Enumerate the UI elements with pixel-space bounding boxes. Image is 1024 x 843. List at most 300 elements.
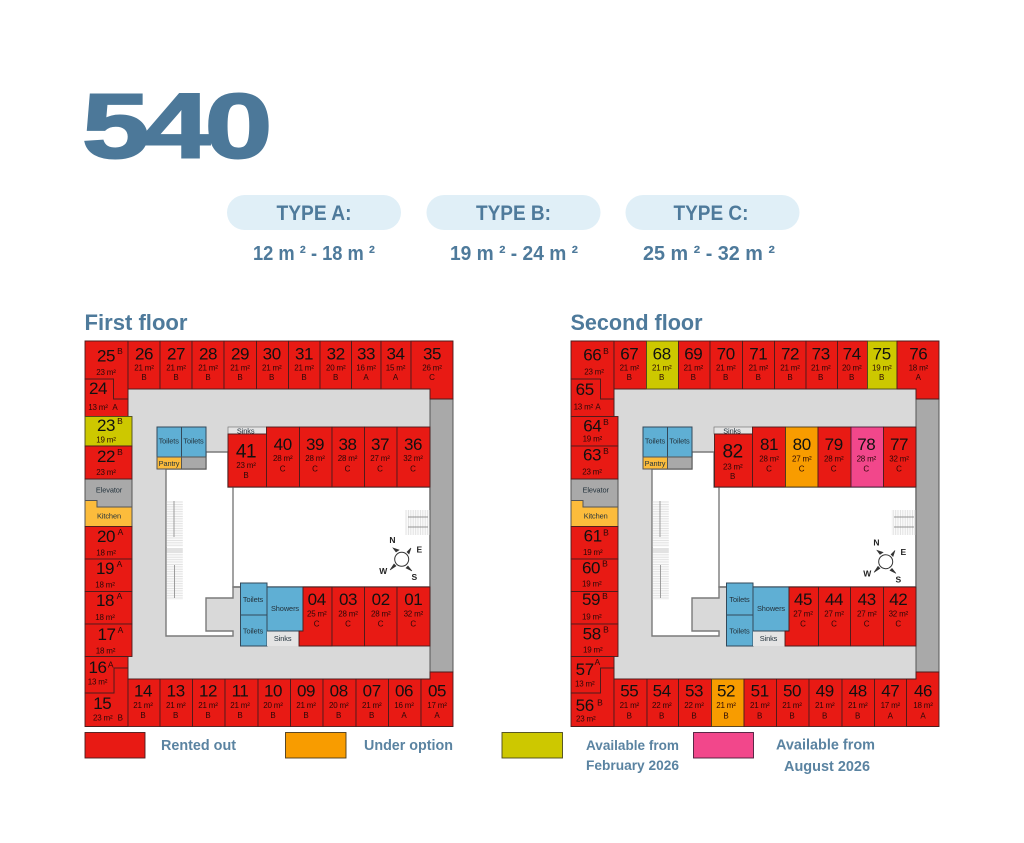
compass: [379, 535, 422, 582]
unit 74: 20 m²: [842, 364, 862, 372]
unit 60: 19 m²: [582, 580, 602, 589]
unit 78: C: [863, 465, 869, 474]
toilets block north: Pantry: [159, 459, 180, 468]
unit 17: 18 m²: [96, 647, 116, 656]
unit 17: 17: [97, 625, 116, 644]
unit 50: [776, 679, 809, 726]
unit 67: [614, 341, 646, 389]
sinks north: [228, 426, 266, 435]
unit 14: 14: [134, 682, 152, 701]
unit 08: 20 m²: [329, 701, 349, 710]
unit 47: 47: [881, 682, 899, 701]
unit 34: [381, 341, 411, 389]
unit 54: 22 m²: [652, 701, 672, 710]
unit 49: [809, 679, 842, 726]
unit 20: 20: [97, 527, 115, 546]
unit 65: 65: [576, 380, 594, 399]
unit 30: 21 m²: [262, 364, 282, 372]
unit 42: 32 m²: [889, 610, 909, 619]
unit 11: 11: [232, 682, 248, 701]
unit 10: [258, 679, 290, 726]
unit 01: [397, 587, 430, 646]
unit 51: [744, 679, 776, 726]
unit 35: [411, 341, 453, 399]
unit 43: 27 m²: [857, 610, 877, 619]
unit 12: 12: [199, 682, 217, 701]
unit 14: 21 m²: [133, 701, 153, 710]
unit 33: A: [363, 373, 369, 382]
compass: N: [873, 537, 880, 547]
elevator: [571, 479, 618, 507]
unit 11: 21 m²: [230, 701, 250, 710]
unit 28: B: [205, 373, 211, 382]
unit 66: [571, 341, 614, 399]
unit 08: [323, 679, 356, 726]
unit 22: B: [117, 447, 123, 457]
unit 04: C: [314, 620, 320, 629]
unit 16: 13 m²: [88, 678, 108, 687]
unit 71: B: [756, 373, 761, 382]
unit 53: B: [691, 712, 697, 720]
unit 19: 19: [96, 559, 114, 578]
unit 42: [884, 587, 916, 646]
unit 44: C: [831, 620, 837, 629]
unit 40: [266, 427, 300, 487]
unit 23: [85, 416, 132, 446]
unit 40: 28 m²: [273, 454, 293, 463]
unit 36: 36: [404, 435, 422, 454]
unit 03: [332, 587, 364, 646]
unit 82: 23 m²: [723, 462, 743, 471]
toilets and showers south: Toilets: [243, 595, 264, 604]
unit 22: 22: [97, 447, 115, 466]
unit 59: 59: [582, 590, 600, 609]
unit 09: 09: [297, 682, 315, 701]
kitchen: Kitchen: [584, 512, 608, 521]
unit 24: 13 m²: [88, 403, 108, 412]
unit 31: 31: [295, 344, 313, 363]
toilets and showers south: Toilets: [729, 627, 750, 636]
unit 20: A: [118, 527, 124, 537]
unit 25: [85, 341, 128, 399]
unit 30: [256, 341, 288, 389]
toilets block north: Toilets: [645, 436, 666, 445]
toilets block north: Toilets: [159, 436, 179, 445]
unit 60: B: [602, 559, 608, 569]
unit 58: 19 m²: [583, 646, 603, 655]
unit 58: 58: [583, 624, 601, 643]
unit 28: [192, 341, 224, 389]
unit 01: 01: [404, 590, 422, 609]
unit 39: C: [312, 464, 318, 473]
unit 77: 77: [890, 435, 908, 454]
unit 57: [571, 656, 614, 693]
unit 29: [224, 341, 256, 389]
unit 32: [320, 341, 352, 389]
unit 58: B: [603, 624, 609, 634]
unit 79: 28 m²: [824, 454, 844, 464]
unit 26: B: [141, 373, 147, 382]
compass: E: [900, 547, 906, 557]
unit 75: 75: [873, 344, 891, 363]
toilets and showers south: [726, 583, 789, 646]
unit 10: B: [270, 711, 276, 720]
compass: N: [389, 535, 396, 545]
unit 33: 16 m²: [356, 364, 376, 372]
unit 34: 34: [386, 344, 405, 363]
unit 66: 23 m²: [584, 367, 604, 376]
unit 04: 04: [308, 590, 326, 609]
unit 59: 19 m²: [582, 612, 602, 621]
unit 15: B: [118, 714, 123, 723]
unit 35: 35: [423, 344, 441, 363]
unit 04: [299, 587, 332, 646]
unit 48: 21 m²: [848, 701, 868, 710]
unit 16: A: [108, 660, 114, 670]
unit 78: [851, 427, 884, 487]
legend: available from August 2026: Available from: [776, 738, 875, 754]
unit 18: A: [117, 591, 123, 601]
unit 44: 44: [825, 590, 843, 609]
unit 68: 21 m²: [652, 364, 672, 372]
unit 12: [192, 679, 225, 726]
unit 65: A: [595, 402, 601, 411]
unit 30: B: [269, 373, 274, 382]
unit 73: 21 m²: [811, 364, 831, 372]
unit 24: A: [112, 403, 118, 412]
unit 06: A: [401, 711, 407, 720]
unit 01: 32 m²: [404, 610, 424, 619]
unit 27: 21 m²: [166, 364, 186, 372]
type A: TYPE A:: [276, 202, 352, 225]
unit 74: B: [849, 373, 854, 382]
unit 73: 73: [812, 344, 830, 363]
unit 79: [818, 427, 851, 487]
unit 66: 66: [583, 346, 601, 365]
unit 79: C: [831, 465, 837, 474]
kitchen: Kitchen: [97, 511, 121, 520]
unit 38: C: [345, 464, 351, 473]
unit 13: B: [173, 711, 178, 720]
unit 69: B: [691, 373, 696, 382]
heading: first floor: First floor: [84, 310, 188, 335]
type C: 25 m ² - 32 m ²: [643, 243, 775, 265]
unit 63: 23 m²: [582, 467, 602, 476]
unit 46: A: [920, 712, 926, 720]
unit 22: [85, 446, 132, 479]
corridor: [128, 389, 430, 679]
unit 67: B: [627, 373, 632, 382]
unit 37: 27 m²: [370, 454, 390, 463]
toilets and showers south: Showers: [271, 604, 299, 613]
unit 03: 03: [339, 590, 357, 609]
unit 03: 28 m²: [338, 610, 358, 619]
unit 25: B: [117, 346, 123, 356]
unit 53: [678, 679, 712, 726]
unit 36: 32 m²: [403, 454, 423, 463]
unit 54: [647, 679, 678, 726]
unit 68: 68: [653, 344, 671, 363]
unit 14: [128, 679, 160, 726]
unit 11: [225, 679, 258, 726]
courtyard: [166, 452, 430, 636]
unit 75: B: [879, 373, 884, 382]
type B: TYPE B:: [476, 202, 551, 225]
unit 10: 20 m²: [263, 701, 283, 710]
unit 30: 30: [263, 344, 281, 363]
unit 54: B: [659, 712, 664, 720]
unit 05: 17 m²: [427, 701, 447, 710]
unit 53: 22 m²: [684, 701, 704, 710]
unit 52: B: [723, 712, 729, 720]
unit 49: B: [822, 712, 827, 720]
unit 41: [228, 434, 266, 487]
unit 67: 67: [620, 344, 638, 363]
unit 23: 19 m²: [96, 436, 116, 445]
unit 76: [897, 341, 939, 399]
unit 28: 28: [199, 344, 217, 363]
unit 37: [364, 427, 397, 487]
type C: [626, 195, 800, 265]
unit 49: 21 m²: [815, 701, 835, 710]
unit 81: C: [766, 465, 772, 474]
unit 10: 10: [264, 682, 282, 701]
unit 43: C: [864, 620, 870, 629]
unit 48: 48: [849, 682, 867, 701]
toilets and showers south: Toilets: [729, 595, 750, 604]
unit 54: 54: [653, 682, 671, 701]
unit 34: 15 m²: [386, 364, 406, 372]
unit 07: 07: [363, 682, 381, 701]
unit 57: 13 m²: [575, 680, 595, 689]
unit 56: 56: [576, 696, 594, 715]
unit 39: 28 m²: [305, 454, 325, 463]
unit 18: [85, 591, 132, 624]
unit 44: [818, 587, 850, 646]
unit 80: 27 m²: [792, 454, 812, 464]
unit 53: 53: [685, 682, 703, 701]
unit 57: A: [594, 657, 600, 667]
unit 64: 19 m²: [583, 435, 603, 444]
unit 32: 20 m²: [326, 364, 346, 372]
unit 39: [300, 427, 332, 487]
unit 77: 32 m²: [889, 454, 909, 464]
unit 40: C: [280, 464, 286, 473]
unit 19: 18 m²: [95, 581, 115, 590]
unit 25: 23 m²: [96, 368, 116, 377]
unit 13: 13: [167, 682, 185, 701]
unit 56: [571, 668, 614, 726]
unit 35: 26 m²: [422, 364, 442, 372]
unit 41: B: [243, 471, 249, 480]
unit 50: 21 m²: [782, 701, 802, 710]
unit 24: [85, 379, 128, 416]
unit 25: 25: [97, 347, 115, 366]
unit 46: [906, 672, 939, 726]
toilets block north: Toilets: [183, 436, 204, 445]
elevator: [85, 479, 132, 507]
unit 76: 18 m²: [909, 364, 929, 372]
unit 48: B: [855, 712, 860, 720]
unit 47: [874, 679, 906, 726]
unit 61: 19 m²: [583, 548, 603, 557]
unit 61: B: [603, 528, 609, 538]
unit 38: 38: [338, 435, 357, 454]
unit 66: B: [603, 346, 609, 356]
compass: W: [863, 568, 872, 578]
unit 76: 76: [909, 344, 927, 363]
unit 64: 64: [583, 417, 601, 436]
unit 20: [85, 526, 132, 559]
unit 06: 06: [395, 682, 413, 701]
legend: under option: Under option: [364, 738, 453, 754]
toilets block north: Toilets: [669, 436, 690, 445]
unit 60: [571, 558, 618, 592]
unit 27: B: [173, 373, 179, 382]
unit 81: [752, 427, 786, 487]
unit 12: B: [205, 711, 211, 720]
unit 17: A: [118, 625, 124, 635]
unit 36: C: [410, 464, 416, 473]
unit 43: [850, 587, 884, 646]
unit 05: [421, 672, 453, 726]
unit 45: [785, 587, 818, 646]
unit 77: [884, 427, 916, 487]
unit 27: [160, 341, 192, 389]
unit 05: 05: [428, 682, 446, 701]
unit 09: 21 m²: [296, 701, 316, 710]
unit 44: 27 m²: [824, 610, 844, 619]
unit 14: B: [140, 711, 146, 720]
unit 52: [712, 679, 744, 726]
legend: rented out: Rented out: [161, 738, 236, 754]
unit 38: [332, 427, 364, 487]
compass: E: [416, 545, 422, 555]
unit 57: 57: [576, 660, 594, 679]
unit 80: [786, 427, 818, 487]
unit 70: 21 m²: [716, 364, 736, 372]
unit 26: [128, 341, 160, 389]
kitchen: [571, 500, 618, 526]
unit 07: B: [369, 711, 374, 720]
elevator: Elevator: [96, 486, 123, 495]
unit 80: 80: [793, 435, 811, 454]
gallery strip: [916, 399, 939, 672]
unit 58: [571, 624, 618, 656]
unit 09: B: [303, 711, 309, 720]
unit 31: [288, 341, 320, 389]
unit 29: 29: [231, 344, 249, 363]
unit 55: B: [627, 712, 632, 720]
unit 37: C: [377, 464, 383, 473]
unit 40: 40: [274, 435, 292, 454]
unit 04: 25 m²: [307, 610, 327, 619]
unit 77: C: [896, 465, 902, 474]
unit 79: 79: [825, 435, 843, 454]
unit 71: 71: [749, 344, 767, 363]
unit 17: [85, 624, 132, 656]
unit 60: 60: [582, 558, 600, 577]
unit 24: 24: [89, 379, 107, 398]
compass: [863, 537, 906, 584]
unit 71: 21 m²: [749, 364, 769, 372]
unit 72: 21 m²: [780, 364, 800, 372]
unit 33: 33: [357, 344, 375, 363]
unit 73: B: [818, 373, 823, 382]
heading: second floor: Second floor: [570, 310, 703, 335]
unit 52: 52: [717, 682, 735, 701]
sinks north: Sinks: [237, 426, 255, 435]
unit 33: [352, 341, 381, 389]
unit 15: 15: [93, 694, 111, 713]
unit 76: A: [916, 373, 922, 382]
unit 32: 32: [327, 344, 345, 363]
unit 42: 42: [889, 590, 907, 609]
panel: unit type legend: [227, 195, 800, 265]
unit 49: 49: [816, 682, 834, 701]
courtyard: [652, 452, 916, 636]
type B: 19 m ² - 24 m ²: [450, 243, 578, 265]
unit 75: [868, 341, 897, 389]
toilets block north: [643, 427, 692, 469]
unit 70: 70: [717, 344, 735, 363]
toilets and showers south: Sinks: [760, 634, 778, 643]
unit 18: 18: [96, 591, 114, 610]
unit 46: 18 m²: [913, 701, 933, 710]
unit 29: B: [237, 373, 243, 382]
unit 63: 63: [583, 446, 601, 465]
unit 56: 23 m²: [576, 715, 596, 724]
unit 69: [678, 341, 710, 389]
unit 72: [774, 341, 806, 389]
unit 52: 21 m²: [716, 701, 736, 710]
unit 72: B: [787, 373, 793, 382]
toilets and showers south: [240, 583, 303, 646]
unit 65: 13 m²: [574, 402, 594, 411]
unit 31: B: [301, 373, 307, 382]
unit 23: 23: [97, 416, 115, 435]
unit 63: [571, 446, 618, 479]
unit 38: 28 m²: [338, 454, 358, 463]
compass: S: [411, 572, 417, 582]
unit 47: 17 m²: [881, 701, 901, 710]
unit 67: 21 m²: [620, 364, 640, 372]
unit 07: [356, 679, 388, 726]
type B: [426, 195, 600, 265]
unit 74: 74: [843, 344, 861, 363]
legend: available from February 2026: [502, 732, 679, 773]
stairs east: [406, 510, 430, 535]
unit 07: 21 m²: [362, 701, 382, 710]
unit 81: 28 m²: [759, 454, 779, 464]
legend: under option: [286, 732, 453, 758]
unit 09: [290, 679, 323, 726]
panel: second floor plan: [571, 341, 939, 726]
unit 65: [571, 379, 614, 416]
unit 31: 21 m²: [294, 364, 314, 372]
gallery strip: [430, 399, 453, 672]
unit 18: 18 m²: [95, 613, 115, 622]
unit 82: B: [730, 472, 735, 481]
legend: available from August 2026: [694, 732, 875, 775]
type A: [227, 195, 401, 265]
unit 39: 39: [306, 435, 324, 454]
unit 02: C: [378, 620, 384, 629]
unit 19: [85, 559, 132, 592]
unit 82: 82: [723, 441, 743, 462]
unit 22: 23 m²: [96, 468, 116, 477]
toilets and showers south: Showers: [757, 604, 785, 613]
